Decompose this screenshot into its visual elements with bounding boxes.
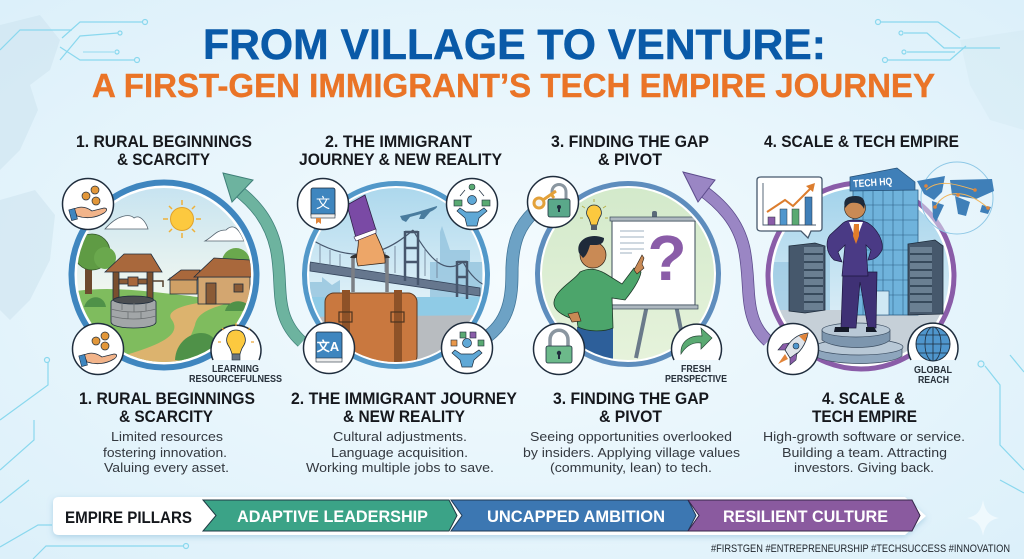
heading: step 2 top: 2. THE IMMIGRANT xyxy=(325,133,472,151)
icon: rocket xyxy=(768,324,818,374)
icon: light bulb with learning resourcefulness label xyxy=(189,323,282,385)
large house xyxy=(194,258,252,304)
heading: step 3 top: & PIVOT xyxy=(598,151,662,169)
text block: step 3: & PIVOT xyxy=(599,408,662,426)
icon: hand with coins (top) xyxy=(62,178,114,230)
businessman xyxy=(827,196,882,332)
whiteboard: ? xyxy=(647,222,687,294)
chevron: uncapped ambition: UNCAPPED AMBITION xyxy=(487,507,665,526)
icon: key and padlock xyxy=(528,176,578,228)
bridge xyxy=(300,230,490,299)
icon: cloud right xyxy=(205,227,244,241)
icon: person with floating tasks (bottom) xyxy=(442,322,492,374)
text block: step 3: 3. FINDING THE GAP xyxy=(553,390,709,408)
icon: green padlock xyxy=(534,324,584,374)
arrow: step 2 to 3 xyxy=(488,212,534,336)
chevron: adaptive leadership xyxy=(203,500,457,531)
background world map xyxy=(0,15,1024,320)
ground xyxy=(78,289,249,362)
text block: step 2: Cultural adjustments. xyxy=(333,429,467,444)
pavement xyxy=(320,315,473,362)
hand and purple sleeve xyxy=(347,195,385,266)
heading: step 3 top: 3. FINDING THE GAP xyxy=(551,133,709,151)
icon: fresh perspective arrow with label xyxy=(665,324,727,385)
text block: step 3: Seeing opportunities overlooked xyxy=(530,429,732,444)
panel: step 1 rural scene xyxy=(70,180,260,372)
text block: step 1: Valuing every asset. xyxy=(104,460,229,475)
icon: fresh perspective arrow with label: FRESH xyxy=(681,363,711,375)
text block: step 1: & SCARCITY xyxy=(119,408,213,426)
text block: step 4: High-growth software or service. xyxy=(763,429,965,444)
text block: step 2 xyxy=(291,390,517,475)
empire pillars bar xyxy=(53,497,926,535)
chevron: adaptive leadership: ADAPTIVE LEADERSHIP xyxy=(237,507,428,526)
tech HQ building: TECH HQ xyxy=(853,176,893,190)
icon: fresh perspective arrow with label: PERSPECTIVE xyxy=(665,373,727,385)
icon: hand with coins (bottom) xyxy=(72,324,124,374)
icon: airplane xyxy=(400,206,437,222)
icon: translation book (bottom): 文A xyxy=(317,339,340,354)
water xyxy=(312,297,480,317)
heading: step 1 top xyxy=(76,133,252,169)
heading: step 2 top xyxy=(299,133,502,169)
icon: translation book (bottom) xyxy=(304,322,354,374)
text block: step 4: TECH EMPIRE xyxy=(812,408,917,426)
decorative sparkle xyxy=(967,500,999,536)
text block: step 1: 1. RURAL BEGINNINGS xyxy=(79,390,255,408)
small house xyxy=(168,270,200,294)
heading: step 3 top xyxy=(551,133,709,169)
icon: cloud left xyxy=(105,216,148,229)
bush xyxy=(84,297,106,307)
skyline xyxy=(310,226,482,298)
text block: step 2: Working multiple jobs to save. xyxy=(306,460,494,475)
title: A FIRST-GEN IMMIGRANT’S TECH EMPIRE JOURNEY xyxy=(92,67,935,104)
tech HQ building xyxy=(850,168,918,315)
text block: step 3: (community, lean) to tech. xyxy=(550,460,712,475)
heading: step 1 top: & SCARCITY xyxy=(117,151,210,169)
text block: step 4: 4. SCALE & xyxy=(822,390,905,408)
icon: translation book (top) xyxy=(298,178,348,230)
label: empire pillars: EMPIRE PILLARS xyxy=(65,509,192,527)
whiteboard xyxy=(610,211,698,309)
server rack left xyxy=(789,243,825,313)
icon: growth chart speech bubble xyxy=(757,177,822,238)
text block: step 1 xyxy=(79,390,255,475)
icon: world map globe xyxy=(917,162,994,234)
chevron: resilient culture xyxy=(688,500,920,531)
heading: step 1 top: 1. RURAL BEGINNINGS xyxy=(76,133,252,151)
text block: step 3: by insiders. Applying village values xyxy=(523,445,740,460)
arrow: step 3 to 4 xyxy=(683,172,768,341)
easel legs xyxy=(636,305,683,358)
icon: global reach globe with label: GLOBAL xyxy=(914,364,953,376)
title xyxy=(92,21,935,104)
heading: step 2 top: JOURNEY & NEW REALITY xyxy=(299,151,502,169)
panel: step 2 city and suitcase scene xyxy=(300,180,490,370)
chevron: resilient culture: RESILIENT CULTURE xyxy=(723,507,888,526)
tree right xyxy=(222,248,250,262)
icon: idea bulb xyxy=(580,199,608,230)
text block: step 4: investors. Giving back. xyxy=(794,460,934,475)
arrow: step 1 to 2 xyxy=(223,173,302,342)
title: FROM VILLAGE TO VENTURE: xyxy=(203,21,826,69)
icon: global reach globe with label xyxy=(908,323,958,386)
server rack right xyxy=(908,240,943,315)
icon: sun xyxy=(163,200,201,238)
person xyxy=(554,236,644,365)
well xyxy=(105,254,163,328)
text block: step 1: fostering innovation. xyxy=(103,445,227,460)
text block: step 1: Limited resources xyxy=(111,429,223,444)
text block: step 3 xyxy=(523,390,740,475)
suitcase xyxy=(325,255,417,366)
text block: step 4: Building a team. Attracting xyxy=(782,445,947,460)
dirt path xyxy=(128,303,224,362)
icon: light bulb with learning resourcefulness label: LEARNING xyxy=(212,363,259,375)
heading: step 4 top: 4. SCALE & TECH EMPIRE xyxy=(764,133,959,151)
icon: light bulb with learning resourcefulness label: RESOURCEFULNESS xyxy=(189,373,282,385)
podium xyxy=(815,323,903,364)
text block: step 2: Language acquisition. xyxy=(331,445,468,460)
panel: step 4 tech empire scene xyxy=(768,168,960,370)
text block: step 2: & NEW REALITY xyxy=(343,408,465,426)
chevron: uncapped ambition xyxy=(451,500,696,531)
tree left xyxy=(74,234,116,294)
icon: translation book (top): 文 xyxy=(316,195,330,211)
icon: global reach globe with label: REACH xyxy=(918,374,949,386)
icon: people juggling tasks (top) xyxy=(446,178,498,230)
text block: step 4 xyxy=(763,390,965,475)
text block: step 2: 2. THE IMMIGRANT JOURNEY xyxy=(291,390,517,408)
panel: step 3 finding the gap scene xyxy=(535,180,725,370)
